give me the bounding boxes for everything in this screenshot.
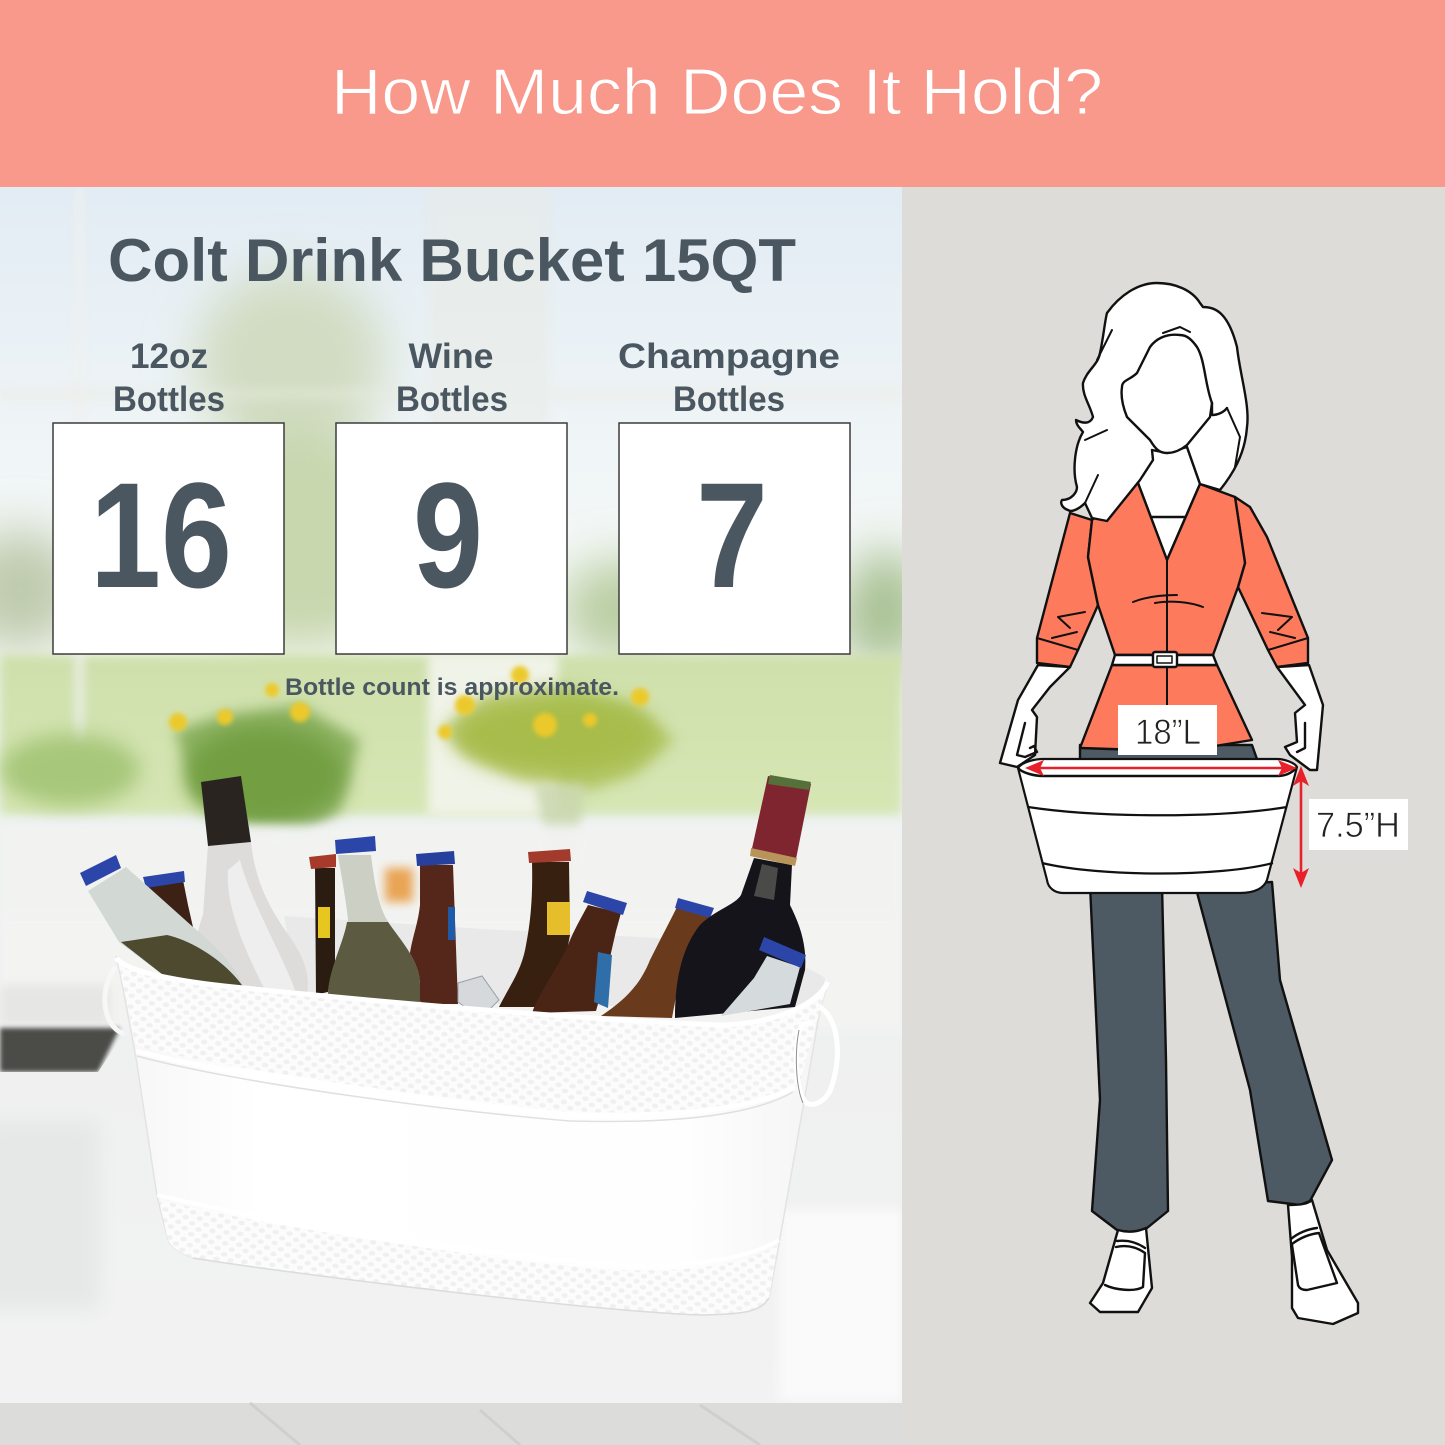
stat box: wine count: 9	[413, 451, 483, 619]
sleeve right	[1235, 497, 1308, 667]
label: 12oz bottles	[113, 337, 225, 419]
figure: woman holding bucket	[1000, 283, 1358, 1324]
neck	[1138, 447, 1200, 560]
ice	[458, 976, 499, 1009]
hand left	[1000, 665, 1070, 767]
white bottle	[195, 842, 308, 995]
shoe right	[1288, 1200, 1358, 1324]
clear bottle front right	[721, 956, 800, 1016]
label: wine bottles: Bottles	[396, 380, 508, 419]
footnote: Bottle count is approximate.	[285, 674, 619, 701]
stat box: wine count	[336, 423, 567, 654]
face	[1122, 335, 1212, 453]
label: length	[1118, 705, 1217, 755]
label: wine bottles: Wine	[408, 337, 494, 376]
blouse	[1088, 483, 1245, 655]
tub interior	[284, 916, 825, 1010]
arrow: length	[1025, 760, 1297, 776]
dimpled band bottom	[159, 1200, 778, 1315]
stat box: 12oz count	[53, 423, 284, 654]
label: champagne bottles	[618, 337, 840, 419]
label: champagne bottles: Champagne	[618, 337, 840, 376]
red wine bottle	[675, 858, 805, 1018]
angled amber bottle	[532, 905, 621, 1013]
label: wine bottles	[396, 337, 508, 419]
header banner	[0, 0, 1445, 187]
belt	[1112, 655, 1217, 665]
arrow: height	[1293, 766, 1309, 888]
label: height	[1309, 799, 1408, 850]
garden foliage	[0, 734, 140, 806]
tub body	[116, 956, 828, 1315]
brown bottle	[409, 865, 458, 1004]
pants	[1090, 885, 1168, 1232]
red cap bottle back	[315, 868, 335, 995]
hair	[1061, 283, 1248, 521]
stat box: champagne count	[619, 423, 850, 654]
handle left	[105, 967, 124, 1034]
label: length: 18”L	[1135, 713, 1201, 752]
shoe left	[1090, 1228, 1152, 1312]
label: champagne bottles: Bottles	[673, 380, 785, 419]
handle right	[796, 1007, 837, 1104]
label: 12oz bottles: Bottles	[113, 380, 225, 419]
tub ridge	[136, 1051, 795, 1116]
red cap amber bottle	[499, 862, 570, 1007]
stat box: 12oz count: 16	[90, 451, 232, 619]
angled brown bottle	[601, 907, 710, 1018]
small brown bottle left	[147, 880, 197, 945]
window frames	[70, 654, 89, 741]
panel: product photo background	[0, 187, 925, 1445]
sleeve left	[1037, 513, 1098, 667]
hand right	[1277, 665, 1323, 770]
white metal bucket	[105, 956, 837, 1315]
clear bottle left angled	[88, 867, 244, 988]
panel: size guide background	[902, 187, 1445, 1445]
figure bucket outline	[1018, 759, 1297, 893]
title: How Much Does It Hold?	[331, 55, 1103, 128]
pants waist	[1080, 745, 1258, 762]
bottles in bucket	[80, 775, 825, 1018]
product heading: Colt Drink Bucket 15QT	[108, 227, 796, 294]
plant leaves	[175, 705, 360, 835]
stat box: champagne count: 7	[696, 451, 768, 619]
label: 12oz bottles: 12oz	[130, 337, 208, 376]
counter and cabinets	[248, 817, 586, 910]
label: height: 7.5”H	[1316, 806, 1400, 845]
dimpled band top	[118, 962, 828, 1113]
clear bottle	[328, 855, 420, 1004]
